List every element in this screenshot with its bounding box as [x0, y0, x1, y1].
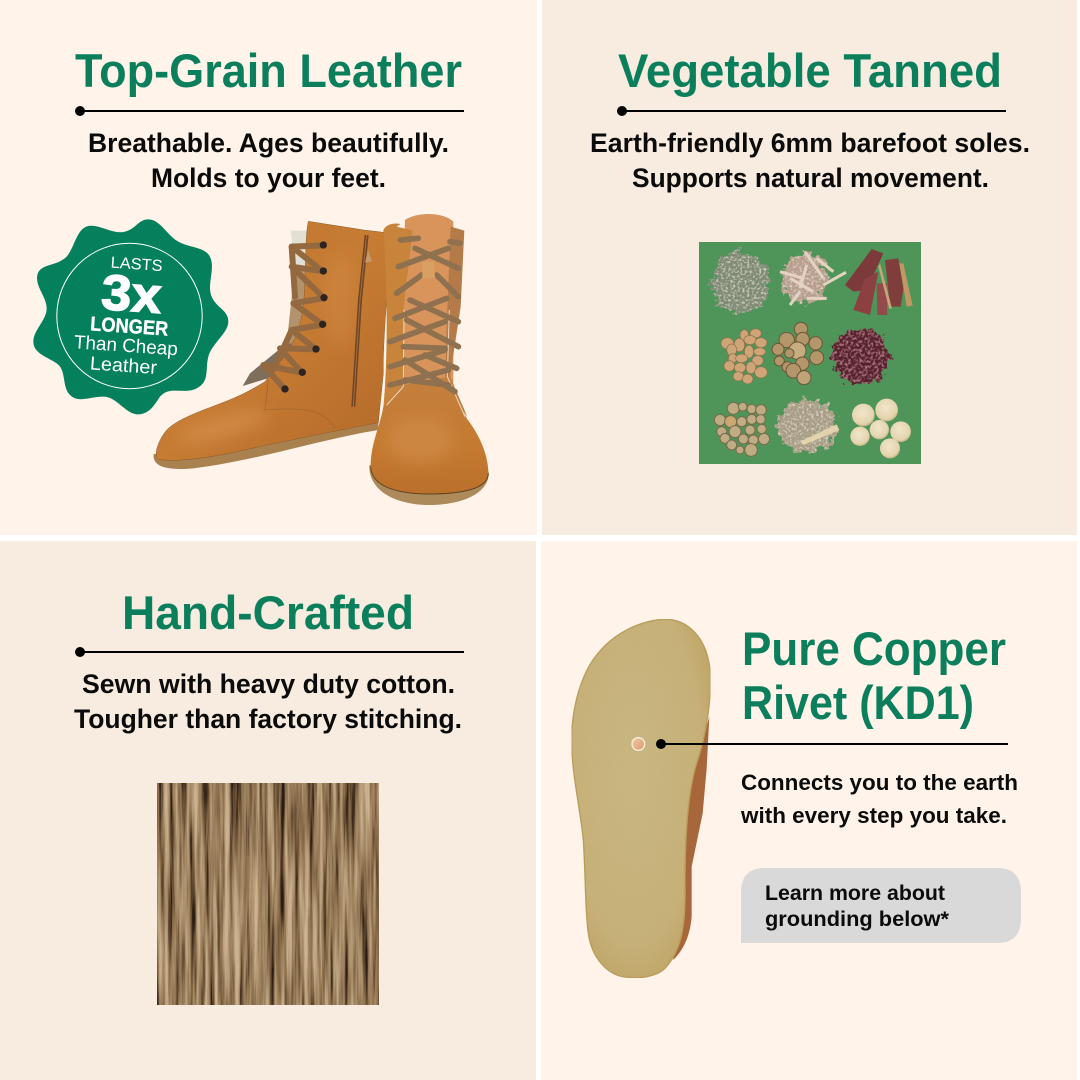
pile: mushrooms	[714, 402, 770, 456]
divider line	[617, 106, 1006, 116]
badge: lasts 3x longer	[33, 219, 228, 414]
image: pair of tan leather boots	[154, 214, 489, 505]
callout: learn more button	[741, 868, 1021, 943]
image: shoe sole with copper rivet	[572, 619, 710, 978]
description text: with every step you take.	[740, 803, 1007, 828]
description text	[740, 770, 1018, 828]
description text	[88, 128, 449, 193]
badge: lasts 3x longer: Leather	[89, 353, 158, 379]
description text	[74, 669, 462, 734]
left boot upper	[156, 221, 392, 460]
pile: pale root shreds	[777, 400, 839, 453]
image: cotton thread strands	[157, 783, 379, 1005]
heading: Top-Grain Leather: Top-Grain Leather	[75, 44, 462, 97]
description text: Sewn with heavy duty cotton.	[82, 669, 455, 699]
right boot laces	[390, 238, 460, 392]
pile: pink bark shreds	[780, 252, 846, 305]
heading: Vegetable Tanned: Vegetable Tanned	[618, 44, 1002, 97]
panel: hand-crafted	[0, 541, 536, 1080]
pile: brown acorn caps	[772, 322, 824, 385]
pile: tan nuts	[721, 329, 767, 384]
badge: lasts 3x longer: Than Cheap	[73, 332, 178, 360]
callout: learn more button: grounding below*	[765, 907, 950, 931]
heading: Pure Copper Rivet (KD1): Pure Copper	[742, 622, 1006, 675]
right boot welt	[369, 465, 489, 505]
heading: Pure Copper Rivet (KD1): Rivet (KD1)	[742, 676, 974, 729]
heading: Pure Copper Rivet (KD1)	[742, 622, 1006, 729]
left boot highlights	[176, 253, 357, 449]
copper rivet	[631, 737, 645, 751]
badge: lasts 3x longer: LONGER	[90, 313, 169, 341]
left boot zipper	[353, 235, 367, 407]
left boot tongue	[243, 231, 307, 386]
pile: grey-green herbs	[712, 252, 769, 313]
description text: Connects you to the earth	[741, 770, 1018, 795]
image: natural tanning ingredients	[699, 242, 921, 464]
panel: vegetable tanned	[542, 0, 1077, 535]
heading: Hand-Crafted: Hand-Crafted	[122, 586, 414, 639]
left boot welt	[154, 422, 378, 469]
description text: Molds to your feet.	[151, 163, 386, 193]
description text: Earth-friendly 6mm barefoot soles.	[590, 128, 1030, 158]
panel: pure copper rivet	[541, 541, 1077, 1080]
panel: top-grain leather	[0, 0, 537, 535]
pile: red bark sticks	[845, 249, 913, 315]
description text	[590, 128, 1030, 193]
divider line	[75, 647, 464, 657]
badge: lasts 3x longer: LASTS	[110, 255, 163, 275]
left boot laces	[263, 245, 324, 389]
sole	[572, 619, 710, 978]
divider line	[656, 739, 1008, 749]
right boot upper	[371, 214, 488, 494]
callout: learn more button: Learn more about	[765, 881, 945, 905]
pile: dark red petals	[833, 328, 889, 385]
badge: lasts 3x longer: 3x	[100, 264, 164, 324]
left boot eyelets	[281, 241, 328, 393]
description text: Supports natural movement.	[632, 163, 989, 193]
divider line	[75, 106, 464, 116]
pile: cream balls	[850, 399, 911, 458]
description text: Tougher than factory stitching.	[74, 704, 462, 734]
boot upper behind sole	[673, 717, 709, 960]
description text: Breathable. Ages beautifully.	[88, 128, 449, 158]
